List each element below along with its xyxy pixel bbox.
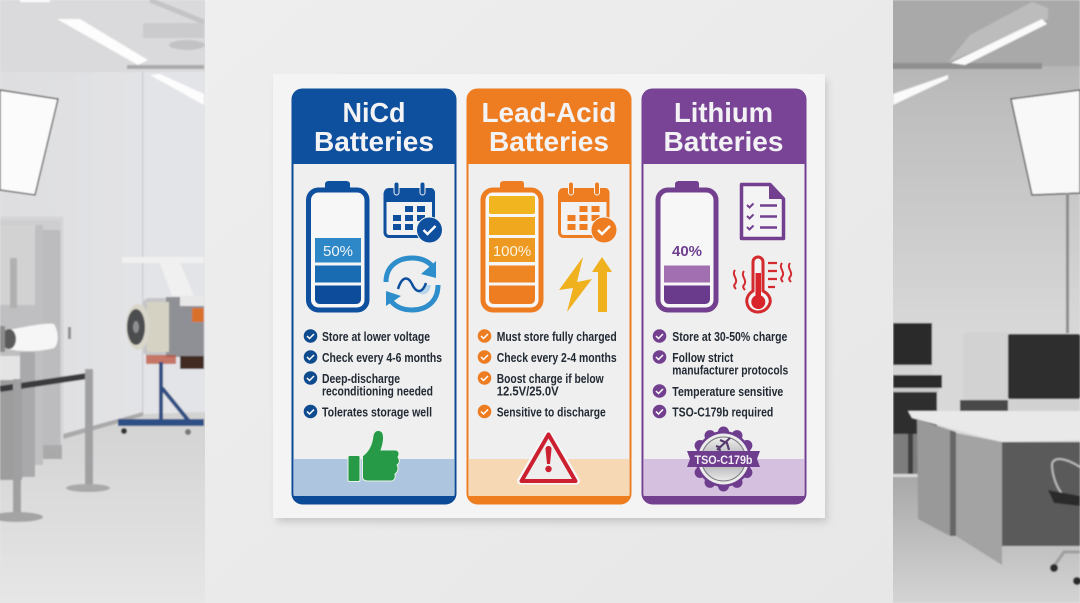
icon: battery 40% xyxy=(658,181,716,310)
background: right office room xyxy=(892,0,1080,603)
bullet list xyxy=(478,329,617,420)
bullet: sensitive: Sensitive to discharge xyxy=(497,406,606,420)
heading xyxy=(292,89,456,164)
icon: recondition cycle xyxy=(386,258,438,310)
bullet: manufacturer protocols: manufacturer protocols xyxy=(672,364,788,378)
bullet: tolerates storage: Tolerates storage well xyxy=(322,406,432,420)
icon: TSO-C179b badge xyxy=(687,426,760,492)
bullet: fully charged: Must store fully charged xyxy=(497,330,617,344)
icon: battery 100%: 100% xyxy=(493,243,531,260)
heading xyxy=(467,89,631,164)
icon: TSO-C179b badge: TSO-C179b xyxy=(694,453,752,467)
icon: battery 40%: 40% xyxy=(672,243,702,260)
bullet list xyxy=(653,329,788,420)
icon: battery 100% xyxy=(483,181,541,310)
poster shadow xyxy=(277,80,827,522)
plane glyph xyxy=(716,438,730,451)
bottom bar xyxy=(293,494,455,504)
bullet: check interval: Check every 2-4 months xyxy=(497,351,617,365)
panel body xyxy=(468,90,630,504)
bullet: boost charge xyxy=(478,371,604,398)
poster board xyxy=(273,74,825,518)
panel: Lithium batteries xyxy=(642,89,806,504)
heading: NiCd xyxy=(342,97,406,128)
bullet: TSO required: TSO-C179b required xyxy=(672,406,773,420)
heading xyxy=(642,89,806,164)
icon: checklist document xyxy=(742,184,784,238)
bullet: manufacturer protocols xyxy=(653,350,788,378)
engine on stand xyxy=(118,257,204,435)
heading: Batteries xyxy=(664,126,784,157)
icon: calendar with check xyxy=(558,182,617,243)
panel: Lead-Acid batteries xyxy=(467,89,631,504)
bottom tint band xyxy=(469,459,629,496)
icon: calendar with check xyxy=(384,182,442,243)
heading: Lead-Acid xyxy=(482,97,616,128)
icon: battery 50% xyxy=(308,181,367,310)
bullet: check interval: Check every 4-6 months xyxy=(322,351,442,365)
heading: Lithium xyxy=(674,97,773,128)
bottom bar xyxy=(643,494,805,504)
bottom bar xyxy=(468,494,630,504)
heading: Batteries xyxy=(489,126,609,157)
bullet: store at charge: Store at 30-50% charge xyxy=(672,330,787,344)
panel: NiCd batteries xyxy=(292,89,456,504)
bullet: reconditioning: reconditioning needed xyxy=(322,384,433,398)
icon: warning triangle xyxy=(520,434,576,481)
bullet: reconditioning: Deep-discharge xyxy=(322,372,400,386)
center wall xyxy=(205,0,893,603)
icon: thermometer with heat xyxy=(734,257,791,312)
bottom tint band xyxy=(644,459,804,496)
icon: thumbs up xyxy=(348,430,399,482)
bullet: store at lower voltage: Store at lower voltage xyxy=(322,330,430,344)
bullet: boost charge: 12.5V/25.0V xyxy=(497,384,559,398)
icon: up arrow xyxy=(592,257,612,312)
bullet: temperature sensitive: Temperature sensitive xyxy=(672,385,783,399)
ribbon xyxy=(687,451,760,467)
heading: Batteries xyxy=(314,126,434,157)
bullet list xyxy=(304,329,442,420)
icon: lightning bolt xyxy=(559,257,592,312)
panel body xyxy=(642,90,806,504)
bullet: manufacturer protocols: Follow strict xyxy=(672,351,734,365)
background: left lab room xyxy=(0,0,206,603)
bullet: boost charge: Boost charge if below xyxy=(497,372,604,386)
panel body xyxy=(292,90,456,504)
icon: battery 50%: 50% xyxy=(323,243,353,260)
bottom tint band xyxy=(294,459,454,496)
bullet: reconditioning xyxy=(304,371,433,398)
